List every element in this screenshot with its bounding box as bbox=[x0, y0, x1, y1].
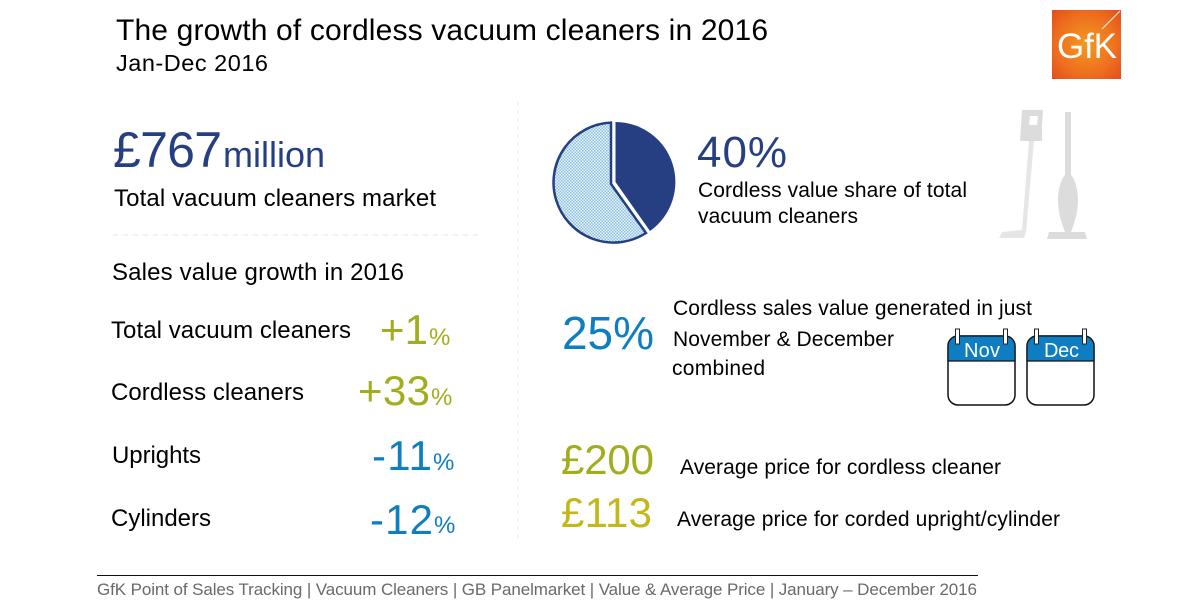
icon: vacuum cleaners bbox=[999, 110, 1087, 239]
row: cylinders bbox=[111, 496, 455, 543]
cordless share: vacuum cleaners bbox=[698, 205, 858, 228]
icon: calendar Nov: Nov bbox=[964, 340, 1000, 362]
November December text: combined bbox=[672, 357, 765, 380]
row: cylinders: Cylinders bbox=[111, 505, 211, 532]
row: total vacuum cleaners bbox=[111, 306, 450, 353]
row: cordless cleaners bbox=[111, 367, 452, 414]
stat: 25%: 25% bbox=[562, 307, 654, 359]
November December text: Cordless sales value generated in just bbox=[673, 297, 1032, 320]
row: total vacuum cleaners: % bbox=[429, 324, 450, 351]
price: corded: £113 bbox=[561, 489, 652, 536]
price: cordless bbox=[561, 436, 1001, 483]
price: corded: Average price for corded upright/cylinder bbox=[677, 508, 1060, 531]
row: total vacuum cleaners: +1 bbox=[380, 306, 428, 353]
pie chart bbox=[554, 122, 675, 243]
row: cylinders: % bbox=[434, 512, 455, 539]
title: The growth of cordless vacuum cleaners in 2016 bbox=[116, 14, 768, 47]
row: uprights: Uprights bbox=[112, 442, 201, 469]
cordless share: Cordless value share of total bbox=[698, 179, 967, 202]
row: uprights bbox=[112, 432, 454, 479]
market value heading bbox=[113, 122, 325, 178]
divider vertical bbox=[517, 102, 519, 542]
logo: GfK bbox=[1052, 10, 1121, 79]
icon: calendar Dec bbox=[1027, 329, 1094, 405]
market value heading: £767 bbox=[113, 122, 222, 178]
market value heading: million bbox=[223, 134, 325, 175]
row: cordless cleaners: +33 bbox=[358, 367, 430, 414]
row: cylinders: -12 bbox=[370, 496, 433, 543]
price: corded bbox=[561, 489, 1060, 536]
November December text: November & December bbox=[673, 328, 894, 351]
icon: calendar Nov bbox=[948, 329, 1015, 405]
growth heading: Sales value growth in 2016 bbox=[112, 259, 404, 286]
row: total vacuum cleaners: Total vacuum cleaners bbox=[111, 317, 351, 344]
title: Jan-Dec 2016 bbox=[116, 50, 268, 76]
price: cordless: £200 bbox=[561, 436, 654, 483]
growth panel bbox=[111, 259, 455, 543]
logo: GfK: GfK bbox=[1057, 27, 1117, 66]
row: uprights: % bbox=[433, 449, 454, 476]
row: uprights: -11 bbox=[372, 432, 432, 479]
November December text bbox=[672, 297, 1032, 380]
cordless share bbox=[697, 128, 967, 228]
title bbox=[116, 14, 768, 76]
icon: calendar Dec: Dec bbox=[1044, 340, 1079, 362]
price: cordless: Average price for cordless cleaner bbox=[680, 456, 1001, 479]
cordless share: 40% bbox=[697, 128, 787, 177]
market label: Total vacuum cleaners market bbox=[114, 185, 436, 212]
row: cordless cleaners: % bbox=[431, 384, 452, 411]
row: cordless cleaners: Cordless cleaners bbox=[111, 379, 304, 406]
footer source: GfK Point of Sales Tracking | Vacuum Cleaners | GB Panelmarket | Value & Average Price | January – December 2016 bbox=[97, 580, 977, 599]
